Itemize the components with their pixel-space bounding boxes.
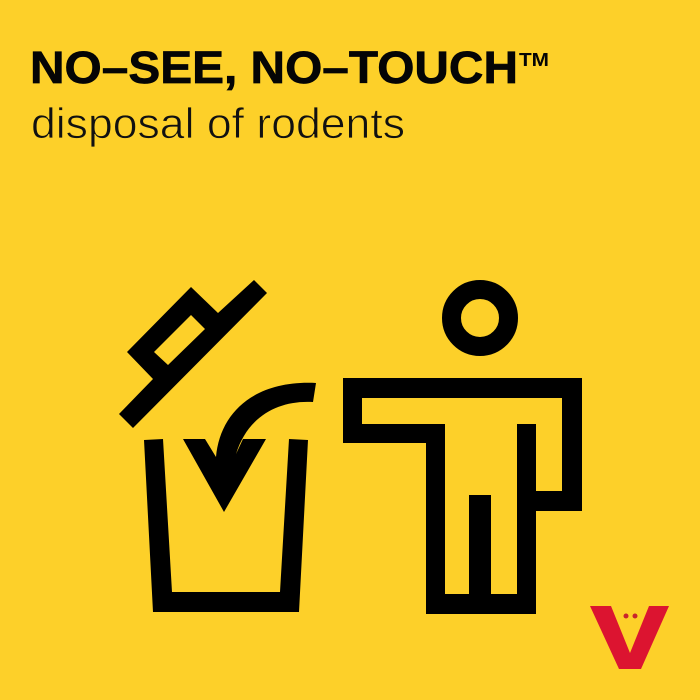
icon: arrow into bin — [183, 383, 316, 512]
title: TM — [519, 50, 549, 70]
subtitle: disposal of rodents — [31, 100, 405, 148]
icon: person body — [343, 378, 582, 614]
logo: red V mark — [590, 606, 669, 669]
icon: person head — [452, 290, 508, 346]
title: NO–SEE, NO–TOUCH — [30, 42, 518, 93]
icon: bin lid with handle — [119, 280, 267, 428]
icon: waste bin — [144, 439, 308, 612]
